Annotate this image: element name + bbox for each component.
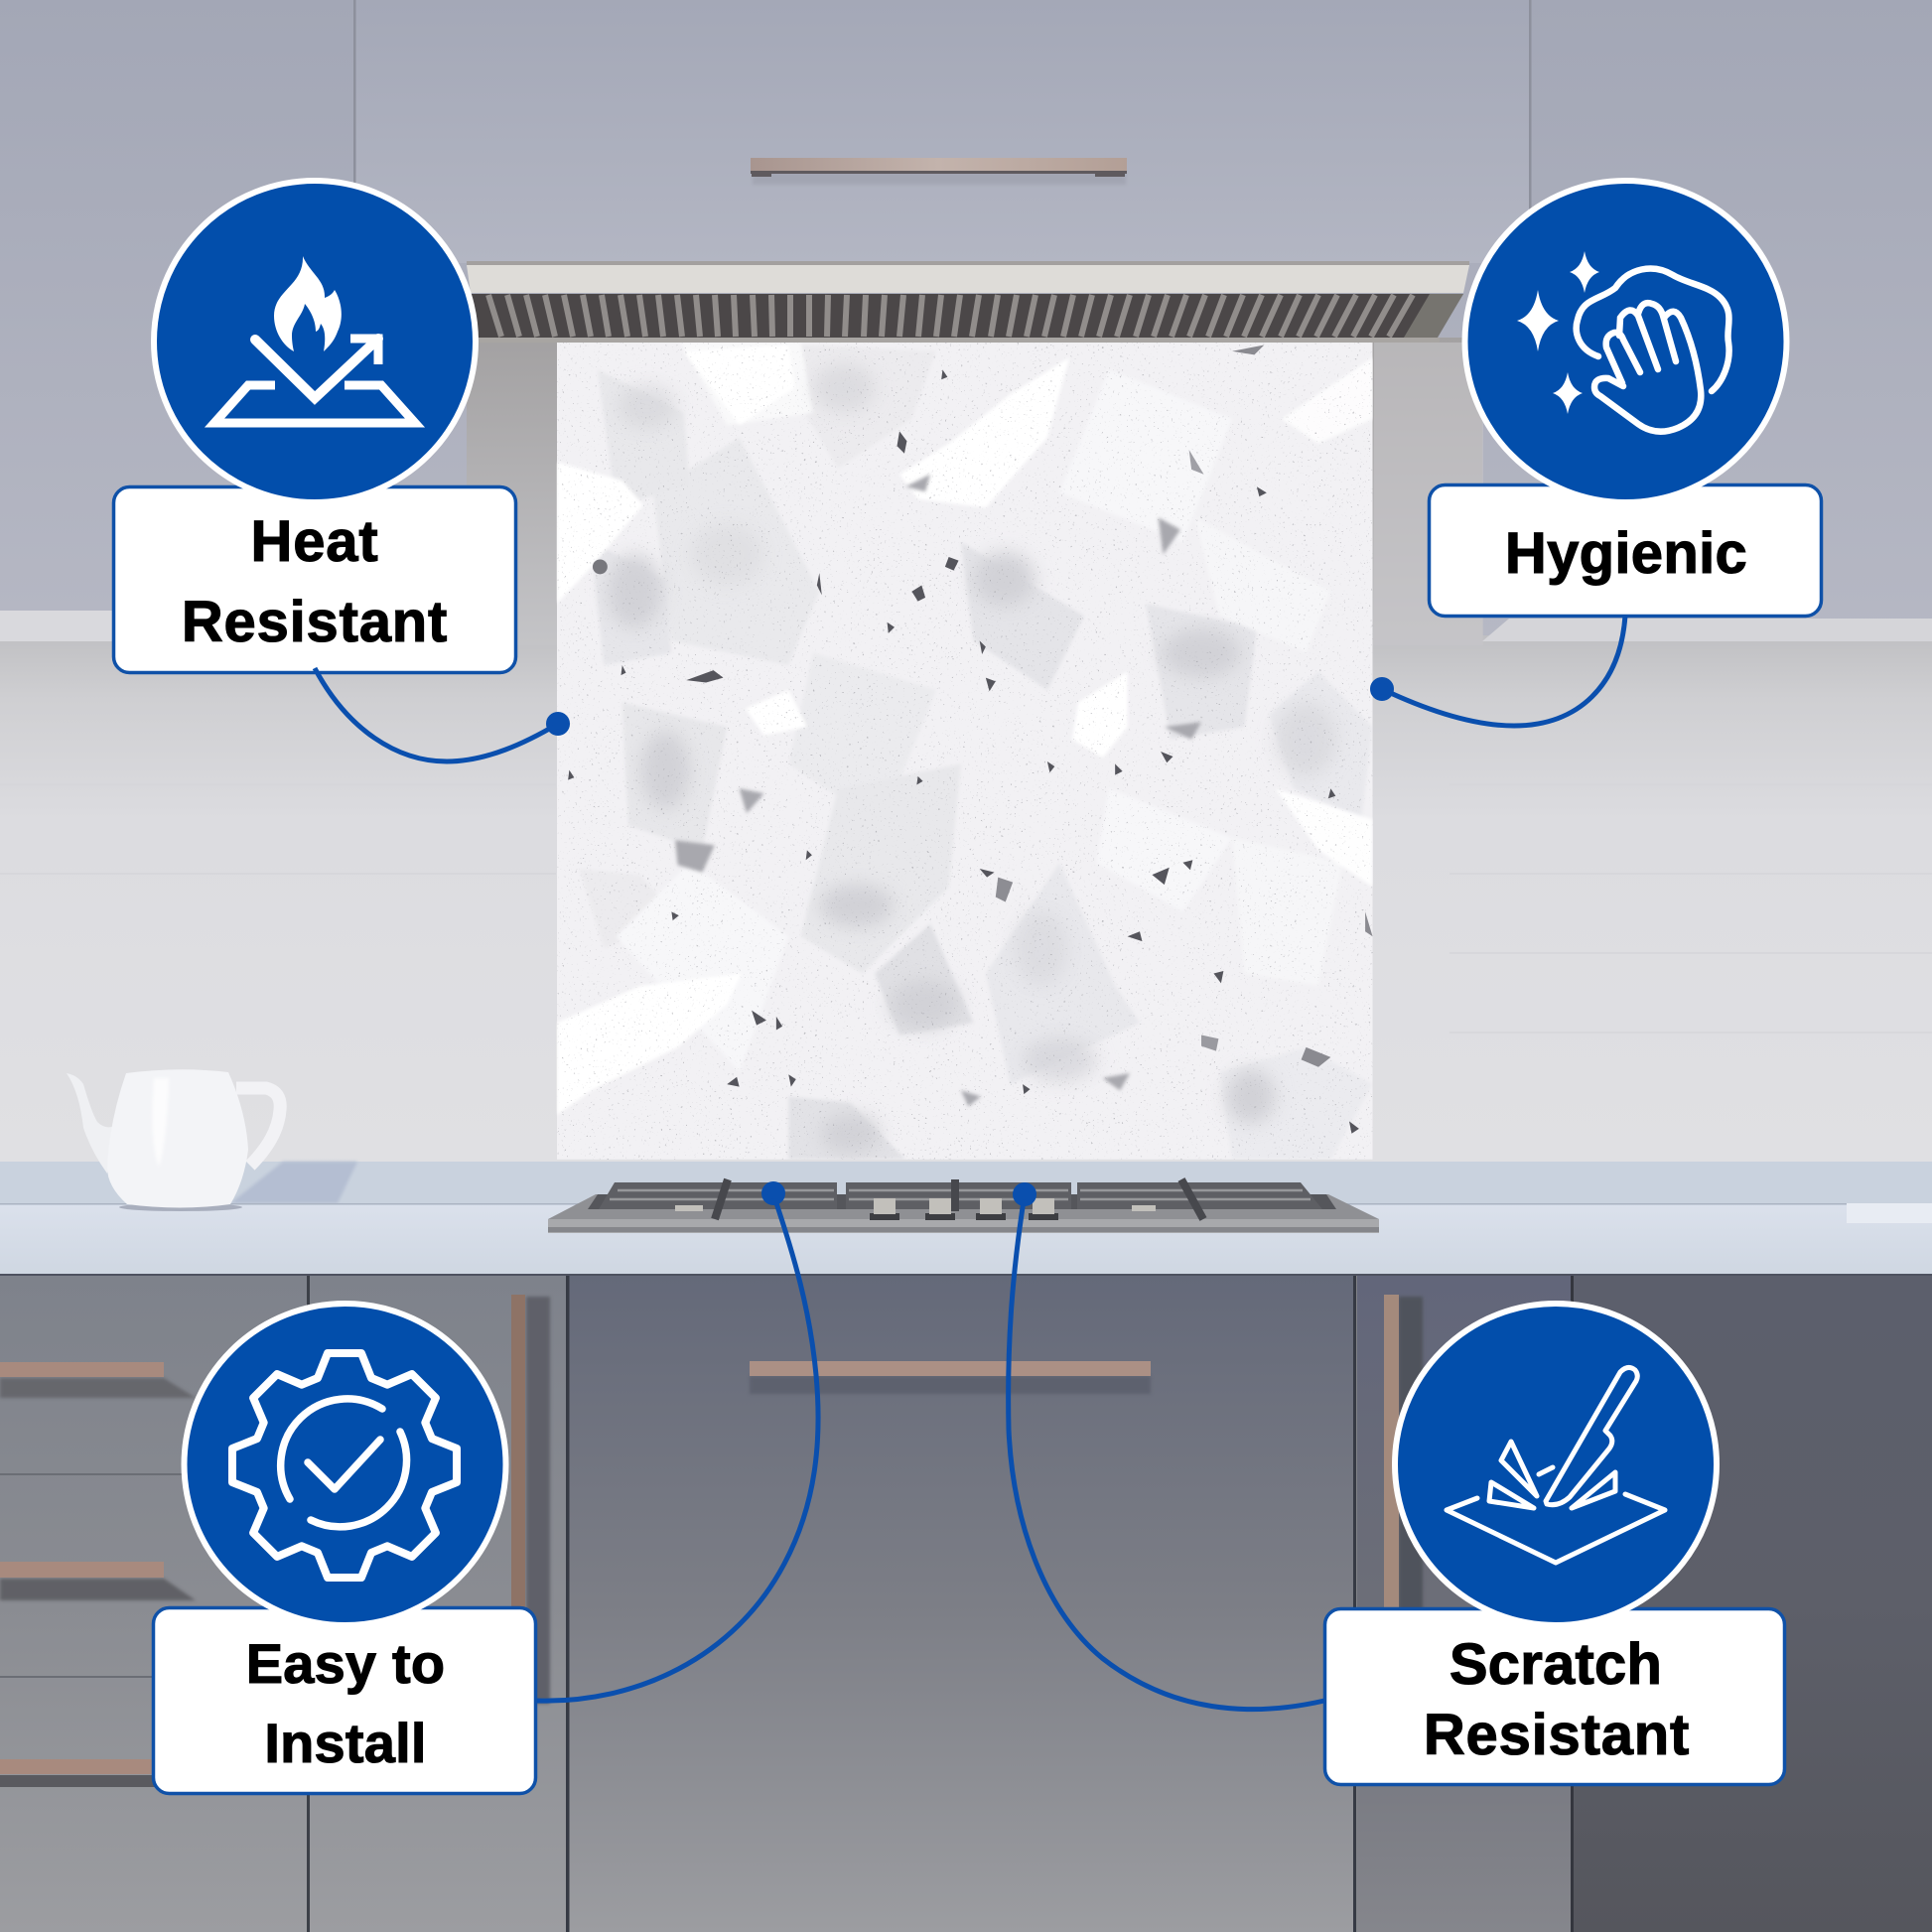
label: scratch resistant: Scratch — [1449, 1632, 1662, 1697]
label: hygienic — [1430, 484, 1821, 616]
label: easy to install — [153, 1608, 536, 1793]
label: scratch resistant: Resistant — [1424, 1703, 1690, 1767]
connector: hygienic — [1373, 616, 1625, 726]
wall — [0, 338, 1932, 1167]
label: heat resistant: Heat — [251, 509, 378, 574]
connector: scratch resistant — [1009, 1185, 1324, 1710]
dark flecks — [568, 345, 1373, 1134]
cabinet handles — [0, 1295, 1423, 1787]
cooktop — [548, 1179, 1379, 1233]
label: hygienic: Hygienic — [1505, 521, 1747, 586]
connector: easy to install — [537, 1184, 818, 1701]
icon: flame over deflecting arrow — [154, 181, 476, 502]
label: heat resistant — [113, 486, 516, 673]
range hood — [467, 261, 1469, 343]
connector: heat resistant — [315, 668, 567, 761]
teapot — [67, 1069, 280, 1211]
base cabinets — [0, 1274, 1932, 1932]
upper door handle — [751, 158, 1127, 185]
fine speckle — [557, 343, 1373, 1160]
upper cabinets — [0, 0, 1932, 645]
large shards — [579, 343, 1373, 1160]
icon: knife scratching surface — [1395, 1304, 1717, 1625]
callout: easy to install — [153, 1184, 818, 1793]
icon: hand wiping with sparkles — [1465, 181, 1787, 502]
label: heat resistant: Resistant — [182, 590, 448, 654]
label: easy to install: Install — [264, 1712, 427, 1774]
icon: gear with check mark — [185, 1304, 506, 1625]
label: scratch resistant — [1324, 1608, 1785, 1785]
label: easy to install: Easy to — [246, 1632, 445, 1695]
callout: heat resistant — [113, 181, 567, 761]
callout: scratch resistant — [1009, 1185, 1785, 1785]
counter and backsplash base — [0, 1162, 1932, 1274]
bright white flakes — [557, 345, 1373, 1115]
callout: hygienic — [1373, 181, 1821, 726]
mottled grey patches — [608, 363, 1337, 1154]
marble splashback panel — [557, 343, 1373, 1160]
